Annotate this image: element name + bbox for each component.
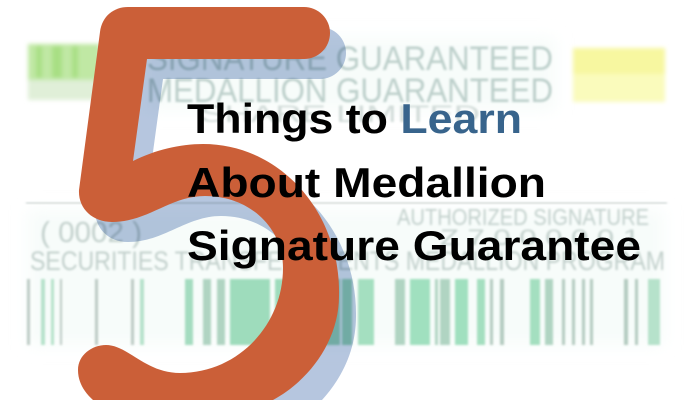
stamp barcode [27, 279, 660, 345]
title line 3: Signature Guarantee [187, 222, 641, 269]
title [187, 95, 641, 269]
stamp text: lower lines: ( 0002 ) [40, 217, 142, 249]
stamp text: lower lines: Z 7 0 0 0 0 0 1 [440, 225, 640, 250]
title line 2: About Medallion [187, 159, 546, 206]
stamp text: guaranteed lines: SHARE LIMITED [200, 101, 480, 128]
stamp text: guaranteed lines: SIGNATURE GUARANTEED [147, 40, 553, 78]
stamp text: guaranteed lines: MEDALLION GUARANTEED [147, 72, 553, 110]
stamp text: lower lines: AUTHORIZED SIGNATURE [397, 204, 649, 230]
stamp text: lower lines [30, 204, 665, 276]
title line 1: Things to Learn [187, 95, 522, 142]
background: blurred medallion stamp [26, 38, 667, 345]
stamp text: guaranteed lines [147, 40, 553, 128]
numeral 5 [78, 7, 339, 400]
stamp divider rule [26, 202, 667, 204]
pale mint halo behind stamp text [28, 38, 664, 345]
yellow stamp patch [573, 48, 665, 102]
green stamp patch [28, 44, 100, 100]
numeral 5 shadow [95, 27, 356, 400]
